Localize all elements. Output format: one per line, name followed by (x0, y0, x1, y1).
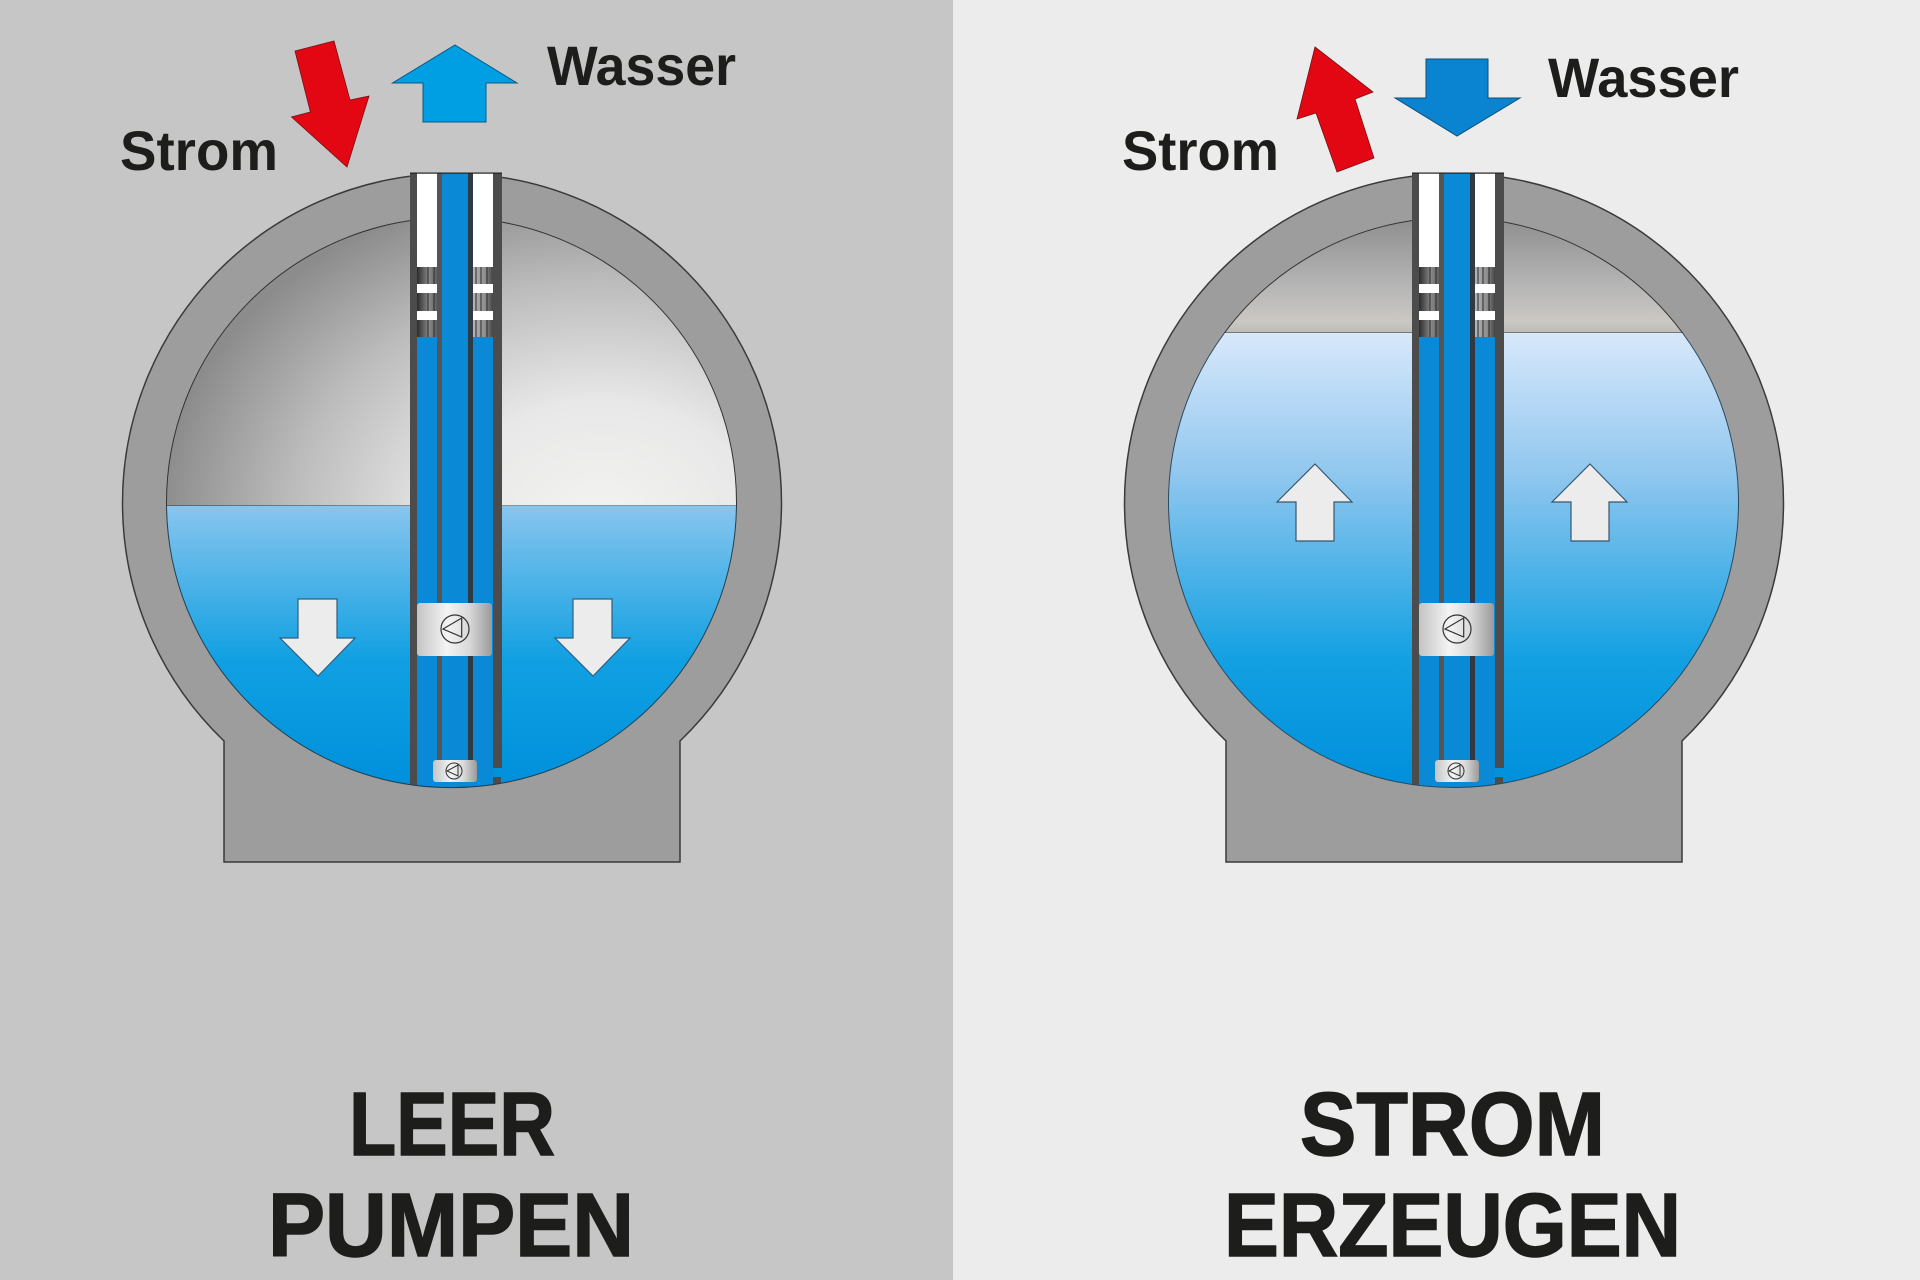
reservoir: concrete shell (122, 174, 781, 862)
arrow: blue water down (1395, 59, 1520, 136)
label: Wasser: Wasser (547, 34, 736, 97)
reservoir: air space (1224, 218, 1683, 333)
pump shaft (410, 172, 502, 793)
panel: left background (0, 0, 953, 1280)
reservoir assembly (1168, 172, 1738, 793)
reservoir: water (1168, 333, 1738, 788)
arrow: water level falling right (555, 599, 630, 676)
title: LEER PUMPEN: LEER (349, 1075, 555, 1175)
arrow: water level rising left (1277, 464, 1352, 541)
title: LEER PUMPEN (268, 1075, 634, 1276)
pump: small turbine band (1435, 760, 1479, 782)
reservoir: air space (166, 218, 737, 506)
pump: large turbine band (1419, 603, 1494, 656)
pump shaft (1412, 172, 1504, 793)
pump: small turbine band (433, 760, 477, 782)
panel: right background (953, 0, 1920, 1280)
arrow: red electricity down (292, 41, 369, 167)
title: STROM ERZEUGEN: STROM (1300, 1075, 1605, 1175)
label: Wasser: Wasser (1548, 46, 1739, 109)
reservoir: water (167, 506, 736, 788)
title: STROM ERZEUGEN: ERZEUGEN (1224, 1176, 1681, 1276)
title: STROM ERZEUGEN (1224, 1075, 1681, 1276)
label: Strom: Strom (120, 119, 278, 182)
panel: leer pumpen (120, 34, 781, 862)
reservoir: concrete shell (1124, 174, 1783, 862)
label: Strom: Strom (1122, 119, 1279, 182)
pump: large turbine band (417, 603, 492, 656)
arrow: red electricity up (1297, 47, 1374, 172)
title: LEER PUMPEN: PUMPEN (268, 1176, 634, 1276)
panel: strom erzeugen (1122, 46, 1783, 862)
arrow: water level falling left (280, 599, 355, 676)
arrow: blue water up (392, 45, 517, 122)
arrow: water level rising right (1552, 464, 1627, 541)
